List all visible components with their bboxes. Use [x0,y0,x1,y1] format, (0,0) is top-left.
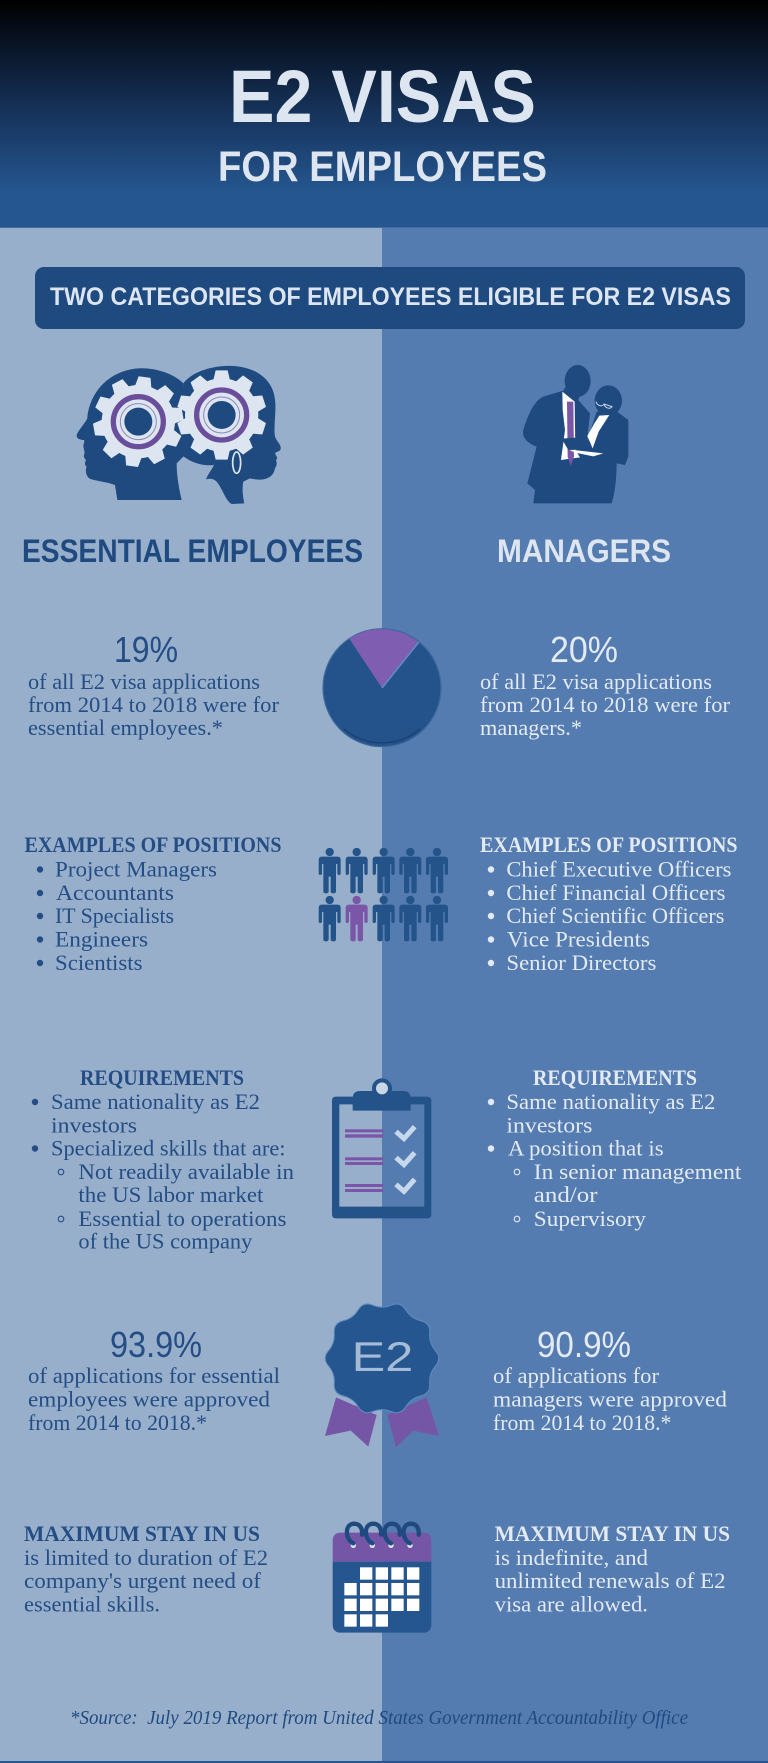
stat: 90.9% approved: managers were approved [493,1386,727,1412]
title: E2 VISAS [229,55,536,138]
stat: 93.9% approved: from 2014 to 2018.* [28,1410,207,1435]
panel: essential employees background [0,228,382,1763]
list: essential employee requirements: REQUIREMENTS [80,1065,244,1090]
panel: managers background [382,228,768,1763]
text: maximum stay managers: unlimited renewals of E2 [495,1568,726,1593]
stat: 20% managers: 20% [550,629,618,670]
list: manager positions: Chief Scientific Officers [506,903,724,928]
text: maximum stay managers [495,1521,730,1616]
banner: two categories [35,267,745,329]
list: manager requirements: investors [506,1112,592,1137]
list: essential employee requirements [32,1065,294,1254]
stat: 93.9% approved: 93.9% [110,1324,202,1365]
list: essential employee positions: IT Specialists [55,903,174,928]
text: maximum stay essential employees: essential skills. [24,1592,160,1616]
stat: 19% essential employees: from 2014 to 2018 were for [28,692,279,717]
stat: 90.9% approved [493,1324,727,1435]
stat: 20% managers: of all E2 visa applications [480,669,712,694]
banner: two categories: TWO CATEGORIES OF EMPLOYEES ELIGIBLE FOR E2 VISAS [50,283,731,311]
icon: spiral calendar [333,1524,431,1633]
text: maximum stay essential employees: company's urgent need of [24,1568,262,1593]
list: manager requirements: REQUIREMENTS [533,1065,697,1090]
bottom strip [0,1761,768,1763]
icon: E2 award badge [325,1304,439,1447]
icon: E2 award badge: E2 [352,1333,413,1380]
list: essential employee positions: Project Managers [55,856,217,882]
list: manager requirements [488,1065,742,1231]
icon: heads with gears [77,366,281,504]
subtitle: FOR EMPLOYEES [218,143,547,191]
text: maximum stay managers: MAXIMUM STAY IN US [495,1521,730,1546]
heading: managers: MANAGERS [497,533,671,569]
source note: *Source: July 2019 Report from United States Government Accountability Office [70,1708,688,1729]
icon: clipboard checklist [332,1080,431,1218]
header band [0,0,768,228]
stat: 19% essential employees: essential employees.* [28,715,223,740]
list: essential employee requirements: the US labor market [78,1182,264,1207]
list: manager positions: Chief Executive Officers [506,856,731,882]
list: manager requirements: and/or [534,1182,598,1207]
stat: 93.9% approved: employees were approved [28,1386,270,1412]
stat: 20% managers: from 2014 to 2018 were for [480,692,730,717]
list: essential employee positions: Scientists [55,950,142,975]
stat: 20% managers: managers.* [480,715,582,740]
list: essential employee requirements: of the US company [78,1228,253,1254]
text: maximum stay essential employees: MAXIMUM STAY IN US [24,1521,260,1546]
list: manager positions: Chief Financial Officers [506,880,725,905]
stat: 20% managers [480,629,730,740]
list: essential employee requirements: Essential to operations [78,1206,286,1231]
list: essential employee requirements: Specialized skills that are: [51,1136,286,1160]
stat: 19% essential employees: of all E2 visa applications [28,669,260,694]
list: essential employee requirements: Same nationality as E2 [51,1089,260,1114]
list: manager positions: EXAMPLES OF POSITIONS [480,832,738,857]
list: essential employee positions: Engineers [55,926,148,952]
list: manager requirements: In senior management [534,1159,742,1184]
text: maximum stay essential employees [24,1521,268,1616]
text: maximum stay essential employees: is limited to duration of E2 [24,1545,268,1570]
text: maximum stay managers: is indefinite, and [495,1545,648,1570]
icon: managers silhouette [523,365,628,503]
list: essential employee positions [24,832,282,975]
list: essential employee requirements: Not readily available in [78,1159,294,1184]
list: manager requirements: Supervisory [534,1206,647,1231]
list: essential employee positions: Accountants [56,880,174,905]
heading: essential employees: ESSENTIAL EMPLOYEES [22,533,363,569]
list: manager requirements: Same nationality as E2 [506,1089,715,1114]
stat: 90.9% approved: of applications for [493,1363,660,1388]
text: maximum stay managers: visa are allowed. [495,1592,648,1616]
stat: 93.9% approved: of applications for essential [28,1363,280,1388]
list: essential employee positions: EXAMPLES OF POSITIONS [24,832,282,857]
stat: 19% essential employees [28,629,279,740]
list: manager requirements: A position that is [508,1136,664,1160]
list: essential employee requirements: investors [51,1112,137,1137]
icon: ten people, one highlighted [319,848,448,941]
list: manager positions [480,832,738,975]
stat: 19% essential employees: 19% [114,629,178,670]
list: manager positions: Vice Presidents [507,926,650,952]
stat: 93.9% approved [28,1324,280,1435]
list: manager positions: Senior Directors [506,950,656,975]
chart: pie of application share [323,629,441,747]
stat: 90.9% approved: 90.9% [537,1324,631,1365]
stat: 90.9% approved: from 2014 to 2018.* [493,1410,671,1435]
